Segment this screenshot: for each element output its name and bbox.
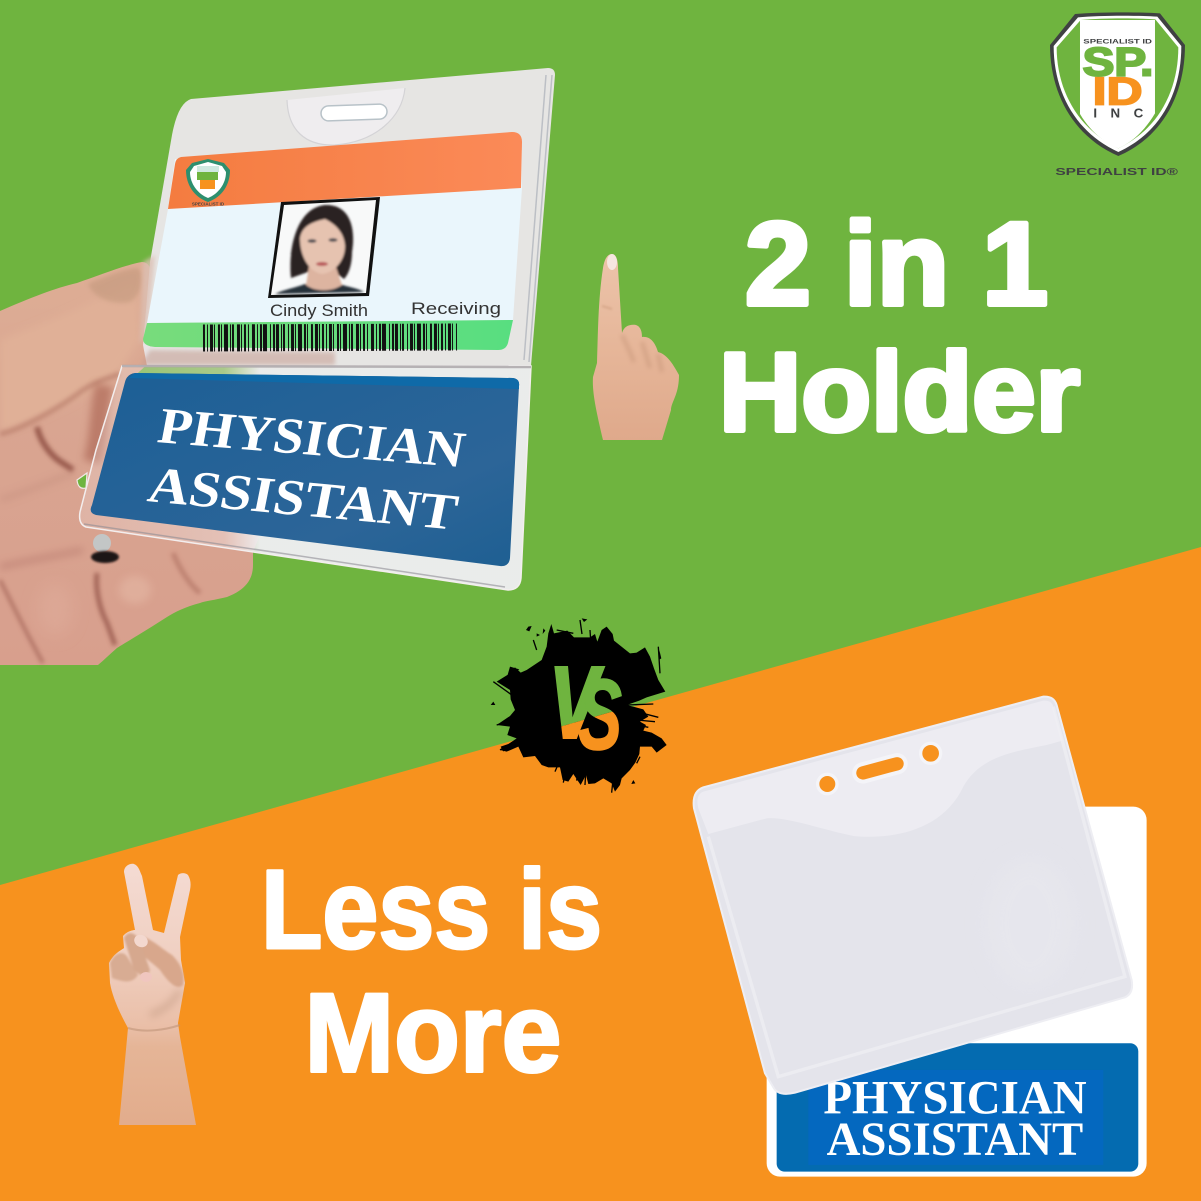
blue badge: PHYSICIAN text: PHYSICIAN <box>154 398 469 479</box>
ID card: name: Cindy Smith <box>270 301 368 320</box>
logo: ID letters: ID <box>1093 70 1143 114</box>
photo: clear double-pocket 2 in 1 badge holder <box>77 68 555 590</box>
holder: right edge reflection <box>524 75 552 362</box>
VS letters: green upper part: V <box>550 647 603 759</box>
VS letters: green upper part <box>554 666 622 726</box>
heading: Holder: Holder <box>719 330 1080 454</box>
logo: white panel <box>1080 20 1155 148</box>
VS letters: orange lower part: S <box>578 659 622 771</box>
blue badge: top edge highlight <box>129 373 519 389</box>
holder: upper pocket shell <box>143 68 555 366</box>
holder: left punch hole <box>818 774 837 794</box>
heading: 2 in 1: 2 in 1 <box>745 198 1048 330</box>
splatter: black ink blot <box>491 618 667 793</box>
icon: hand pointing one finger up <box>593 254 679 440</box>
holder: pocket soft reflections <box>987 860 1073 987</box>
ID card: mini shield logo <box>186 159 230 206</box>
icon: VS paint splatter badge <box>491 618 667 793</box>
ID card: department: Receiving <box>411 299 501 318</box>
holder: reflection under card <box>140 350 335 365</box>
logo: shield outer outline <box>1050 12 1185 156</box>
ID card <box>143 132 522 350</box>
heading: Less is: Less is <box>261 847 602 972</box>
ring clip: silver stud <box>93 534 111 552</box>
holder: inner edge seam <box>708 707 1125 1077</box>
ID card: barcode <box>203 337 457 338</box>
holder: right punch hole <box>921 743 941 763</box>
logo: wordmark: SPECIALIST ID® <box>1055 167 1179 178</box>
holder: top tab outline <box>287 88 405 145</box>
ID card: green bar <box>143 320 513 350</box>
badge text: ASSISTANT: ASSISTANT <box>827 1114 1083 1166</box>
holder: thumb showing through upper pocket <box>140 255 155 345</box>
holder: centre slot <box>852 753 908 784</box>
holder: lower pocket shell <box>80 366 531 590</box>
logo: shield white rule <box>1054 16 1181 152</box>
holder: lower blue badge <box>91 373 519 566</box>
holder: fold line between pockets <box>122 366 531 367</box>
clear vinyl holder shell <box>694 697 1132 1094</box>
logo: Specialist ID shield <box>1050 12 1185 178</box>
holder: green gap through the hand <box>77 473 87 488</box>
logo: INC letters: INC <box>1093 105 1144 120</box>
photo: hand holding the 2 in 1 holder <box>0 262 262 665</box>
badge text: PHYSICIAN: PHYSICIAN <box>823 1072 1087 1124</box>
icon: hand showing two fingers <box>109 864 196 1125</box>
photo: single-use badge holder with blue badge <box>694 697 1147 1177</box>
logo: shield green interior <box>1057 18 1178 148</box>
holder: upper flap highlight <box>697 701 1063 837</box>
heading: More: More <box>304 970 562 1096</box>
VS letters: green upper part: S <box>578 659 622 771</box>
ID card: portrait photo <box>268 197 380 298</box>
holder: lanyard slot <box>321 104 387 121</box>
VS letters: orange lower part <box>561 712 619 751</box>
ID card: mini shield logo: SPECIALIST ID <box>192 202 225 206</box>
holder: lower edge shadow line <box>84 524 505 587</box>
VS letters: orange lower part: V <box>550 647 603 759</box>
white badge card <box>767 807 1147 1177</box>
ID card: white body <box>147 150 522 323</box>
blue badge: ASSISTANT text: ASSISTANT <box>144 457 463 541</box>
logo: small name: SPECIALIST ID <box>1083 39 1152 46</box>
ring clip: dark shadow <box>91 551 119 563</box>
background: orange diagonal lower area <box>0 547 1201 1201</box>
ID card: orange band <box>168 132 522 209</box>
logo: SP letters: SP. <box>1083 40 1153 84</box>
blue badge area <box>777 1043 1138 1172</box>
blue badge inner band <box>808 1070 1103 1165</box>
